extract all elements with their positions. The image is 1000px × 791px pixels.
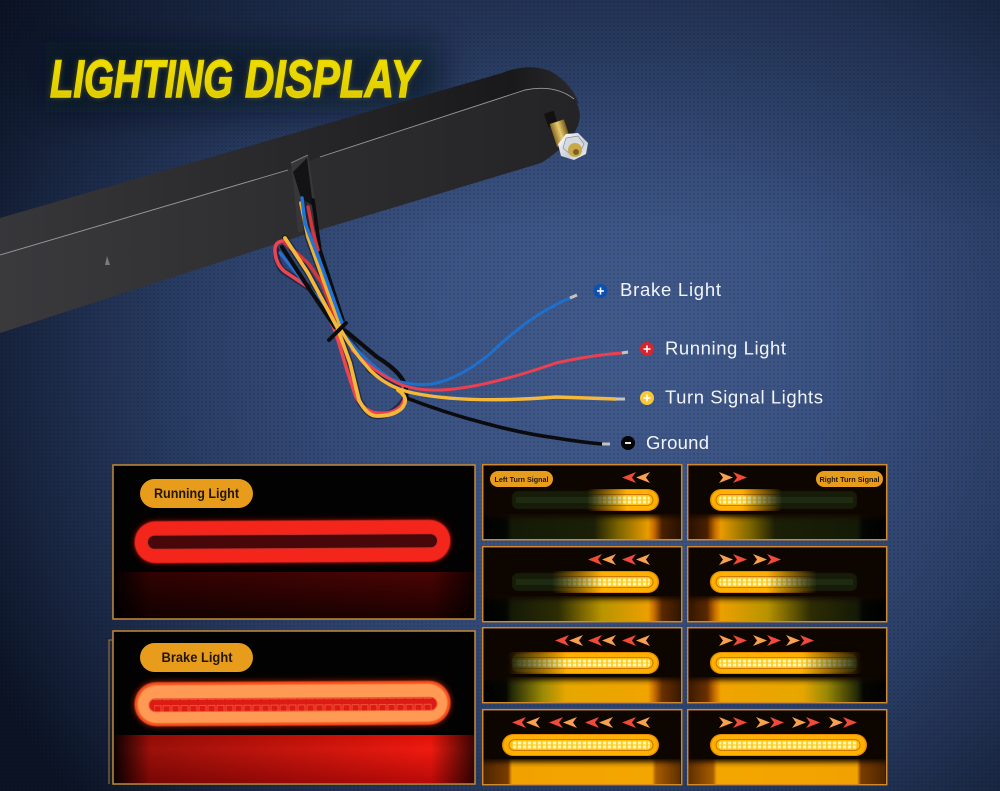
bracket red wire — [308, 207, 318, 250]
upper red wire — [285, 243, 335, 318]
wire harness — [275, 198, 628, 444]
panel: left turn step 3 — [483, 628, 682, 703]
title: lighting display — [45, 42, 440, 112]
bracket black wire — [313, 200, 343, 320]
black loop wire — [282, 247, 406, 398]
panel: brake light — [109, 631, 475, 784]
title: lighting display: LIGHTING — [50, 50, 233, 109]
panel: left turn step 2 — [483, 547, 682, 622]
running light reflection — [114, 572, 474, 618]
black lead — [404, 397, 602, 444]
title: lighting display: LIGHTING — [50, 50, 233, 109]
mounting bolt — [544, 111, 588, 160]
title: lighting display: DISPLAY — [245, 50, 422, 109]
brake light reflection — [114, 735, 474, 783]
looped blue wire — [280, 253, 338, 326]
panel: right turn step 4 — [688, 710, 887, 785]
running light pill — [140, 479, 253, 508]
yellow lead — [341, 330, 616, 400]
arrows — [622, 472, 650, 483]
brake light pill: Brake Light — [162, 650, 233, 665]
brake light lamp — [134, 680, 451, 727]
upper yellow wire and loop — [285, 238, 405, 416]
title: lighting display: DISPLAY — [245, 50, 422, 109]
running light lamp — [134, 519, 451, 564]
light bar housing — [0, 67, 580, 333]
bracket blue wire — [302, 198, 342, 323]
panel: right turn step 2 — [688, 547, 887, 622]
label: running light: Running Light — [665, 338, 786, 358]
stripped wire tips — [570, 295, 628, 444]
panel: running light — [113, 465, 475, 619]
cable tie — [329, 323, 346, 340]
left turn signal pill: Left Turn Signal — [494, 475, 548, 484]
left turn signal pill — [490, 471, 553, 487]
wire bracket — [291, 155, 315, 233]
running light pill: Running Light — [154, 486, 239, 501]
wire shadow — [276, 200, 406, 416]
looped red wire — [275, 241, 405, 413]
right turn signal pill: Right Turn Signal — [820, 475, 880, 484]
bracket yellow wire — [301, 203, 340, 325]
panel: right turn step 3 — [688, 628, 887, 703]
panel: left turn step 4 — [483, 710, 682, 785]
blue lead — [345, 298, 570, 384]
brake light pill — [140, 643, 253, 672]
right turn signal pill — [816, 471, 883, 487]
panel: right turn step 1 — [688, 465, 887, 540]
label: turn signal lights: Turn Signal Lights — [665, 386, 823, 408]
panel: left turn step 1 — [483, 465, 682, 540]
label: brake light: Brake Light — [620, 279, 721, 300]
label: ground: Ground — [646, 432, 709, 453]
red lead — [352, 350, 622, 390]
